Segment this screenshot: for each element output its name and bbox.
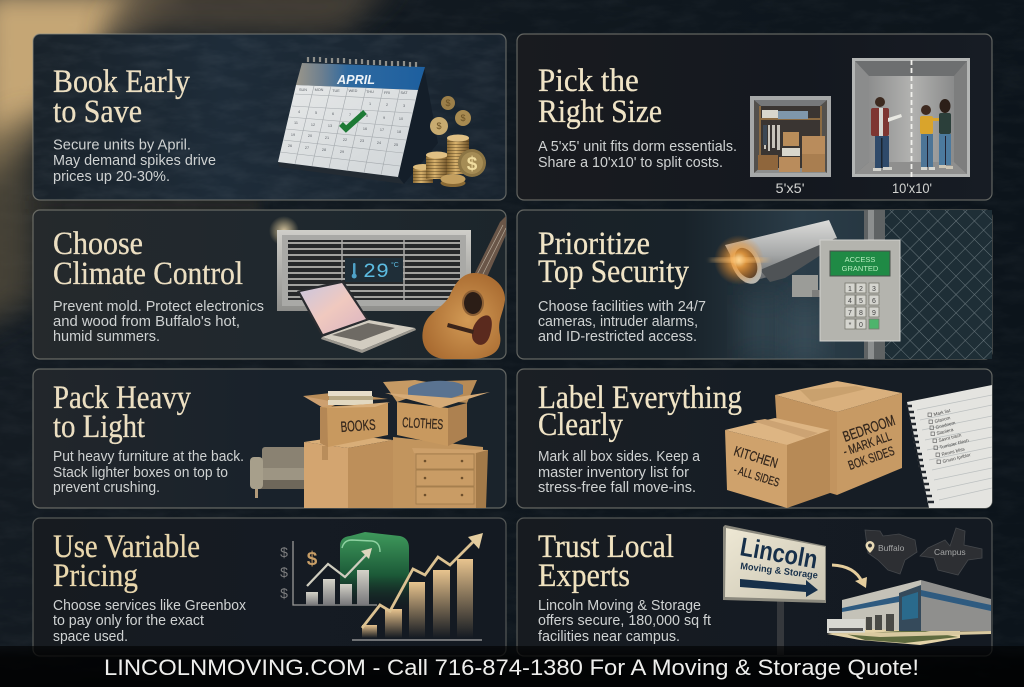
icon: spiral notebook checklist	[906, 385, 992, 508]
day numbers: 11	[294, 121, 298, 125]
icon: gold coin stacks: $	[445, 98, 451, 108]
day numbers: 25	[394, 143, 398, 147]
box label: bedroom	[841, 412, 897, 473]
body text: label everything: stress-free fall move-ins.	[538, 480, 696, 496]
chart: small price chart	[280, 541, 377, 605]
body text: trust local: offers secure, 180,000 sq ft	[538, 613, 711, 629]
day numbers: 29	[340, 150, 344, 154]
day numbers: THU	[366, 90, 374, 94]
icon: green storage box	[340, 532, 409, 610]
icon: security camera	[709, 220, 838, 297]
body text: top security: cameras, intruder alarms,	[538, 314, 698, 330]
icon: gold coin stacks: $	[467, 154, 478, 175]
day numbers: 1	[369, 102, 371, 106]
icon: access keypad: 7	[848, 310, 852, 317]
panel: book early to save	[33, 34, 506, 200]
icon: gold coin stacks: $	[460, 113, 466, 123]
heading: use variable pricing	[53, 529, 200, 594]
map labels: Campus	[934, 547, 966, 557]
day numbers: TUE	[332, 89, 340, 93]
icon: access keypad: *	[849, 322, 852, 329]
large bottom box	[304, 435, 393, 508]
person: woman in yellow	[920, 105, 941, 170]
checklist: Staniera	[936, 427, 954, 436]
icon: air vent with thermostat	[269, 216, 471, 311]
chart: small price chart: $	[280, 585, 288, 601]
panel: pack heavy to light	[33, 369, 506, 508]
heading: pack heavy: Pack Heavy	[53, 380, 191, 416]
sign: lincoln moving and storage: Moving & Storage	[740, 561, 818, 581]
body text: variable pricing: space used.	[53, 629, 128, 645]
body text: pack heavy	[53, 449, 244, 496]
heading: trust local experts: Experts	[538, 558, 630, 594]
person: man in plaid	[871, 97, 902, 171]
icon: air vent with thermostat: °C	[391, 261, 399, 269]
checklist: Savnt trach	[938, 432, 962, 443]
body text: pack heavy: Put heavy furniture at the back.	[53, 449, 244, 465]
heading: book early	[53, 64, 190, 130]
body text: climate control: humid summers.	[53, 329, 160, 345]
day numbers: 20	[308, 134, 312, 138]
checklist: Renns bliss	[941, 446, 966, 457]
icon: access keypad: 1	[848, 286, 852, 293]
day numbers: 23	[360, 139, 364, 143]
thermostat reading: 29	[363, 261, 389, 284]
icon: access keypad: 8	[859, 310, 863, 317]
panel: label everything clearly	[517, 369, 992, 508]
body text: pack heavy: prevent crushing.	[53, 480, 160, 496]
day numbers: 12	[311, 123, 315, 127]
heading: use variable pricing: Use Variable	[53, 529, 200, 565]
heading: trust local experts: Trust Local	[538, 529, 674, 565]
footer call to action text: LINCOLNMOVING.COM - Call 716-874-1380 For A Moving & Storage Quote!	[104, 655, 919, 680]
body text: variable pricing	[53, 598, 246, 645]
box label: books: BOOKS	[340, 417, 376, 436]
body text: variable pricing: to pay only for the exact	[53, 613, 204, 629]
icon: kitchen box	[725, 418, 830, 508]
person: woman in dark top	[939, 99, 953, 169]
icon: access keypad: 9	[872, 310, 876, 317]
sign: lincoln moving and storage	[723, 525, 826, 656]
day numbers: 5	[315, 111, 317, 115]
heading: choose climate control	[53, 226, 243, 292]
body text: book early: Secure units by April.	[53, 138, 191, 154]
day numbers: 3	[403, 104, 405, 108]
day numbers: 22	[343, 138, 347, 142]
clothes box	[383, 380, 490, 446]
body text: trust local	[538, 598, 711, 645]
day numbers: 17	[380, 128, 384, 132]
icon: access keypad: 0	[859, 322, 863, 329]
body text: pick the right size: Share a 10'x10' to split costs.	[538, 155, 723, 171]
arrow: curved gold	[832, 565, 867, 588]
icon: acoustic guitar	[422, 212, 510, 359]
heading: choose climate control: Climate Control	[53, 256, 243, 292]
chart: large rising gold bars	[352, 533, 483, 640]
day numbers: 18	[397, 130, 401, 134]
heading: prioritize top security: Top Security	[538, 254, 689, 290]
body text: label everything: Mark all box sides. Keep a	[538, 449, 700, 465]
heading: label everything: Clearly	[538, 407, 623, 443]
heading: prioritize top security	[538, 226, 689, 290]
back box	[393, 437, 483, 508]
body text: pack heavy: Stack lighter boxes on top to	[53, 465, 228, 481]
day numbers: 26	[288, 144, 292, 148]
heading: pack heavy: to Light	[53, 409, 145, 445]
body text: variable pricing: Choose services like Greenbox	[53, 598, 246, 614]
dresser	[412, 448, 488, 508]
icon: gold coin stacks	[413, 96, 486, 187]
books box	[303, 391, 390, 447]
access granted display: GRANTED	[842, 264, 879, 273]
map pin	[866, 541, 874, 553]
heading: pack heavy	[53, 380, 191, 445]
footer bar	[0, 646, 1024, 687]
day numbers: 21	[325, 136, 329, 140]
sign: lincoln moving and storage: Lincoln	[738, 531, 820, 574]
body text: top security: and ID-restricted access.	[538, 329, 697, 345]
body text: climate control: and wood from Buffalo's hot,	[53, 314, 240, 330]
check mark	[341, 112, 365, 129]
day numbers: 2	[386, 103, 388, 107]
icon: access keypad: 4	[848, 298, 852, 305]
body text: top security	[538, 299, 706, 345]
body text: climate control: Prevent mold. Protect electronics	[53, 299, 264, 315]
icon: sofa	[250, 447, 306, 498]
checklist	[928, 408, 972, 464]
month label: APRIL	[336, 73, 375, 87]
day numbers: SAT	[400, 91, 408, 95]
day numbers: 7	[349, 113, 351, 117]
day numbers: 6	[332, 112, 334, 116]
day numbers: FRI	[384, 91, 390, 95]
box label: kitchen: - ALL SIDES	[732, 462, 781, 490]
day numbers: MON	[315, 88, 324, 92]
blurred building backdrop	[745, 295, 820, 359]
map labels: Buffalo	[878, 543, 905, 553]
box label: kitchen	[732, 443, 781, 490]
chart: small price chart: $	[280, 564, 288, 580]
icon: access keypad: 3	[872, 286, 876, 293]
icon: access keypad	[820, 240, 900, 341]
checklist: Mark list	[933, 408, 952, 417]
access granted display: ACCESS	[845, 255, 875, 264]
icon: stacked boxes and dresser	[303, 380, 490, 508]
checklist: Glanom	[934, 415, 951, 424]
body text: label everything	[538, 449, 700, 496]
icon: gold coin stacks: $	[436, 121, 442, 131]
fence pole	[864, 210, 885, 359]
panel: pick the right size	[517, 34, 992, 200]
checklist: Tumister blesh	[939, 438, 970, 450]
panel: choose climate control	[33, 210, 510, 359]
box label: bedroom: - MARK ALL	[841, 428, 893, 459]
heading: choose climate control: Choose	[53, 226, 143, 262]
icon: access keypad: 6	[872, 298, 876, 305]
heading: book early: Book Early	[53, 64, 190, 100]
illustration: 10x10 storage unit with people	[852, 58, 970, 177]
label: 5x5: 5'x5'	[776, 181, 804, 196]
day numbers: 4	[298, 110, 300, 114]
day numbers: 16	[363, 127, 367, 131]
panel: trust local experts	[517, 518, 992, 656]
heading: label everything	[538, 380, 742, 443]
chart: small price chart: $	[307, 549, 318, 570]
keypad buttons	[845, 283, 879, 329]
body text: climate control	[53, 299, 264, 345]
box label: bedroom: BOK SIDES	[846, 443, 897, 473]
day numbers: 9	[383, 116, 385, 120]
day numbers: 13	[328, 124, 332, 128]
heading: pick the right size	[538, 63, 662, 130]
day numbers: 19	[291, 133, 295, 137]
body text: book early: prices up 20-30%.	[53, 169, 170, 185]
heading: pick the right size: Right Size	[538, 94, 662, 130]
body text: top security: Choose facilities with 24/7	[538, 299, 706, 315]
icon: laptop	[297, 280, 416, 353]
checklist: Goodnem	[935, 420, 956, 430]
panel: use variable pricing	[33, 518, 506, 656]
day numbers: 24	[377, 141, 381, 145]
box label: clothes: CLOTHES	[402, 414, 444, 432]
heading: book early: to Save	[53, 94, 142, 130]
panel: prioritize top security	[517, 210, 992, 359]
day numbers: 27	[305, 146, 309, 150]
chart: small price chart: $	[280, 544, 288, 560]
body text: trust local: Lincoln Moving & Storage	[538, 598, 701, 614]
body text: pick the right size: A 5'x5' unit fits dorm essentials.	[538, 139, 737, 155]
heading: pick the right size: Pick the	[538, 63, 639, 99]
map: buffalo and campus	[865, 528, 982, 575]
lens flare	[709, 235, 769, 285]
illustration: storage facility building	[827, 580, 991, 645]
body text: label everything: master inventory list for	[538, 465, 689, 481]
label: 10x10: 10'x10'	[892, 181, 932, 196]
day numbers: 28	[322, 148, 326, 152]
icon: access keypad: 5	[859, 298, 863, 305]
chain-link fence	[885, 210, 992, 359]
heading: prioritize top security: Prioritize	[538, 226, 650, 262]
box label: bedroom: BEDROOM	[841, 412, 897, 446]
body text: book early: May demand spikes drive	[53, 153, 216, 169]
illustration: 5x5 storage unit	[750, 96, 831, 177]
icon: desk calendar	[278, 57, 438, 184]
body text: trust local: facilities near campus.	[538, 629, 680, 645]
heading: label everything: Label Everything	[538, 380, 742, 416]
heading: trust local experts	[538, 529, 674, 594]
box label: kitchen: KITCHEN	[732, 443, 780, 471]
day numbers: 8	[366, 114, 368, 118]
day numbers: WED	[349, 89, 358, 93]
checklist: Gnusn Iprlblor	[942, 452, 972, 464]
heading: use variable pricing: Pricing	[53, 558, 138, 594]
body text: pick the right size	[538, 139, 737, 171]
body text: book early	[53, 138, 216, 185]
day numbers: SUN	[299, 88, 307, 92]
icon: access keypad: 2	[859, 286, 863, 293]
day numbers: 10	[399, 117, 403, 121]
icon: bedroom box	[775, 381, 902, 495]
